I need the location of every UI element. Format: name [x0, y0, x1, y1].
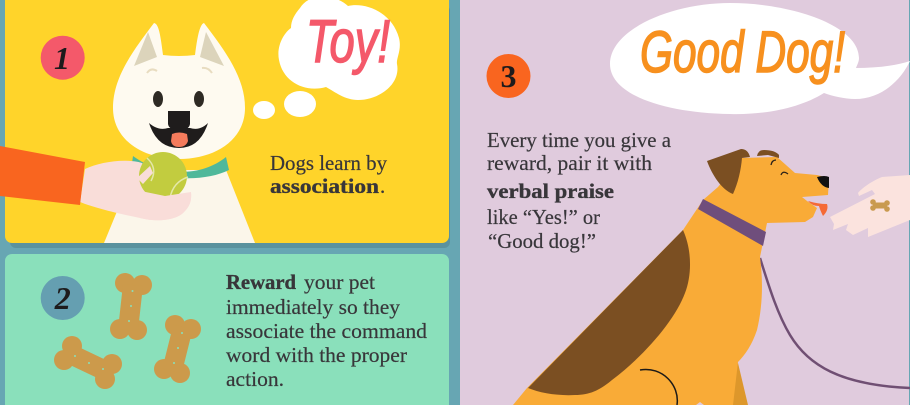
number badge 3: 3 — [500, 58, 516, 94]
text: association — [270, 151, 387, 198]
panel: step 3 — [460, 0, 910, 405]
text: reward: immediately so they — [226, 295, 401, 319]
number badge 1: 1 — [54, 40, 70, 76]
icon: leash — [760, 258, 910, 388]
panel: step 2 — [5, 254, 449, 405]
text: reward: action. — [226, 367, 284, 391]
icon: brown dog — [513, 149, 829, 405]
icon: bone right — [154, 315, 201, 383]
text: association: association — [270, 174, 379, 198]
thought bubble — [253, 0, 400, 119]
icon: tennis ball — [139, 152, 188, 200]
speech bubble — [610, 3, 910, 114]
text: verbal praise — [487, 128, 672, 253]
icon: bone left — [54, 336, 122, 389]
text: verbal praise: “Good dog!” — [488, 229, 596, 253]
text: reward — [226, 270, 428, 391]
text: verbal praise: Every time you give a — [487, 128, 672, 152]
icon: bone top — [110, 273, 152, 340]
text: reward: your pet — [304, 270, 375, 294]
text: association: Dogs learn by — [270, 151, 387, 175]
text: reward: Reward — [226, 270, 296, 294]
text: verbal praise: verbal praise — [487, 179, 614, 203]
number badge 1 — [41, 36, 85, 80]
text: reward: word with the proper — [226, 343, 407, 367]
icon: orange sleeve — [0, 146, 85, 205]
icon: hand with treat — [830, 175, 910, 237]
panel: step 1 — [0, 0, 449, 243]
icon: white dog — [104, 23, 255, 243]
text: reward: associate the command — [226, 319, 428, 343]
text: association: . — [380, 174, 385, 198]
number badge 3 — [486, 54, 530, 98]
thought bubble: Toy! — [306, 8, 390, 75]
text: verbal praise: like “Yes!” or — [487, 205, 600, 229]
number badge 2 — [41, 276, 85, 320]
icon: hand holding ball — [80, 152, 191, 220]
text: verbal praise: reward, pair it with — [487, 151, 653, 175]
number badge 2: 2 — [54, 280, 71, 316]
